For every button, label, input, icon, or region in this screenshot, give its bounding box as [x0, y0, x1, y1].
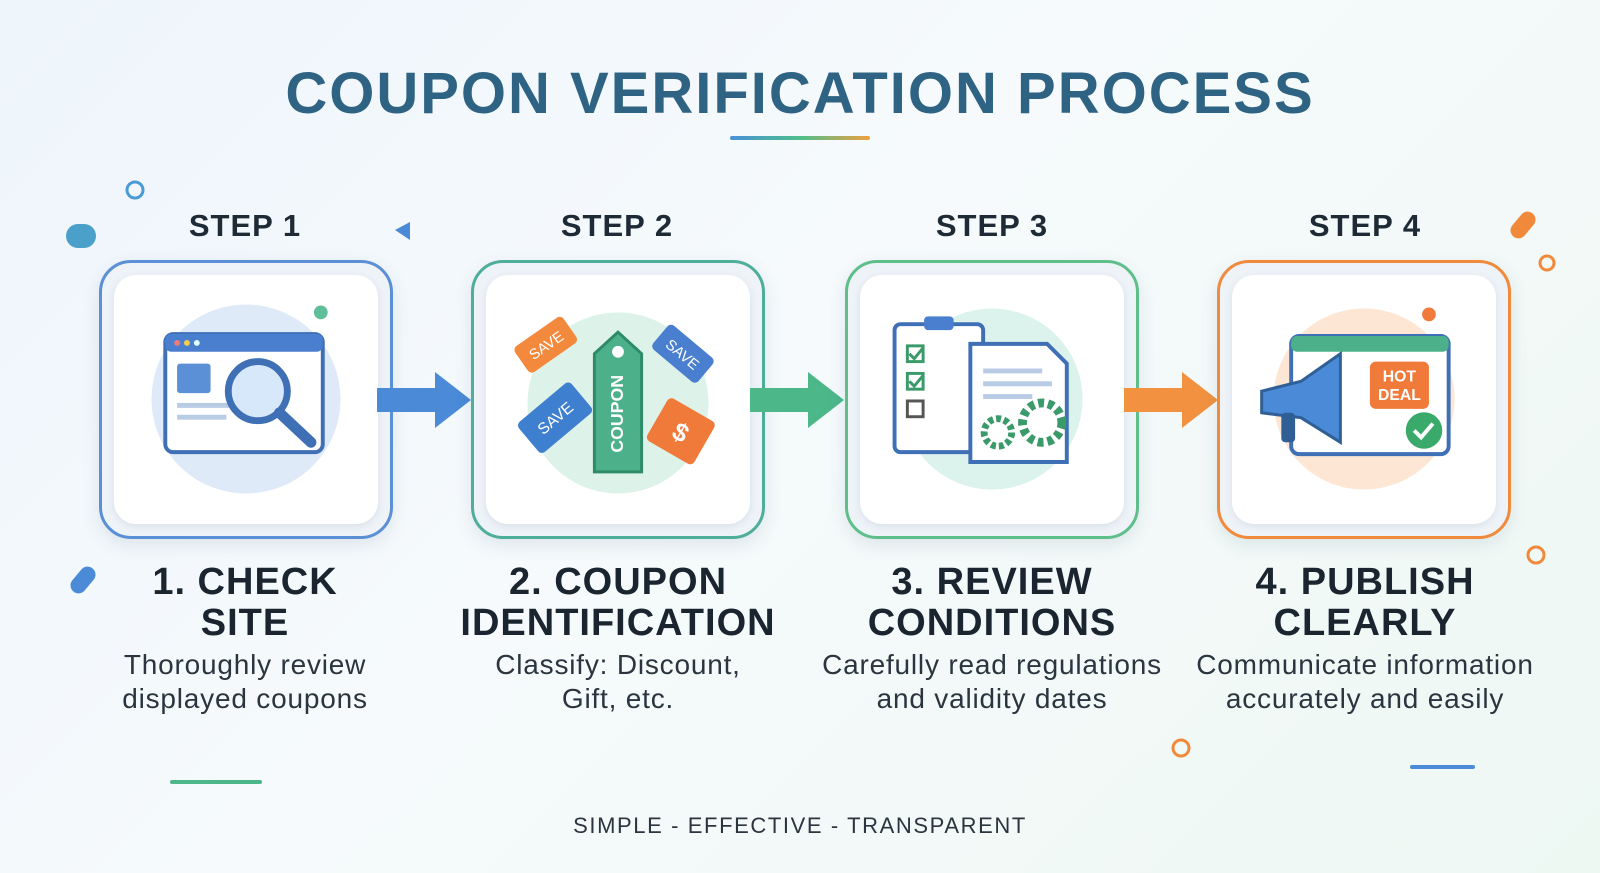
- step label 1: STEP 1: [189, 208, 301, 243]
- description 4: [1196, 649, 1534, 714]
- step label 4: STEP 4: [1309, 208, 1421, 243]
- card 2: coupon identification: $: [667, 417, 693, 449]
- heading 3: 3. REVIEW: [891, 561, 1093, 603]
- description 4: Communicate information: [1196, 649, 1534, 680]
- description 1: Thoroughly review: [124, 649, 366, 680]
- description 4: accurately and easily: [1226, 683, 1504, 714]
- heading 4: [1255, 561, 1475, 644]
- arrow 2: [750, 372, 844, 428]
- step label 3: STEP 3: [936, 208, 1048, 243]
- step label 2: STEP 2: [561, 208, 673, 243]
- footer tagline: SIMPLE - EFFECTIVE - TRANSPARENT: [573, 813, 1027, 838]
- heading 2: IDENTIFICATION: [460, 602, 776, 644]
- card 1: check site: [99, 260, 393, 539]
- heading 1: 1. CHECK: [152, 561, 338, 603]
- heading 3: CONDITIONS: [868, 602, 1116, 644]
- heading 1: [152, 561, 338, 644]
- card 4: publish clearly: HOT: [1383, 368, 1416, 385]
- description 2: [495, 649, 741, 714]
- card 2: coupon identification: [471, 260, 765, 539]
- description 2: Classify: Discount,: [495, 649, 741, 680]
- heading 4: 4. PUBLISH: [1255, 561, 1475, 603]
- description 1: [122, 649, 368, 714]
- card 2: coupon identification: SAVE: [527, 329, 567, 364]
- heading 1: SITE: [201, 602, 289, 644]
- description 1: displayed coupons: [122, 683, 368, 714]
- title: COUPON VERIFICATION PROCESS: [285, 61, 1315, 126]
- description 3: Carefully read regulations: [822, 649, 1162, 680]
- heading 3: [868, 561, 1116, 644]
- arrow 1: [377, 372, 471, 428]
- heading 4: CLEARLY: [1274, 602, 1456, 644]
- description 3: and validity dates: [877, 683, 1107, 714]
- description 3: [822, 649, 1162, 714]
- card 4: publish clearly: [1217, 260, 1511, 539]
- heading 2: 2. COUPON: [509, 561, 727, 603]
- card 2: coupon identification: SAVE: [535, 399, 577, 438]
- description 2: Gift, etc.: [562, 683, 674, 714]
- card 4: publish clearly: DEAL: [1378, 387, 1421, 404]
- card 3: review conditions: [845, 260, 1139, 539]
- arrow 3: [1124, 372, 1217, 428]
- heading 2: [460, 561, 776, 644]
- card 2: coupon identification: SAVE: [662, 337, 702, 374]
- card 2: coupon identification: COUPON: [607, 375, 627, 453]
